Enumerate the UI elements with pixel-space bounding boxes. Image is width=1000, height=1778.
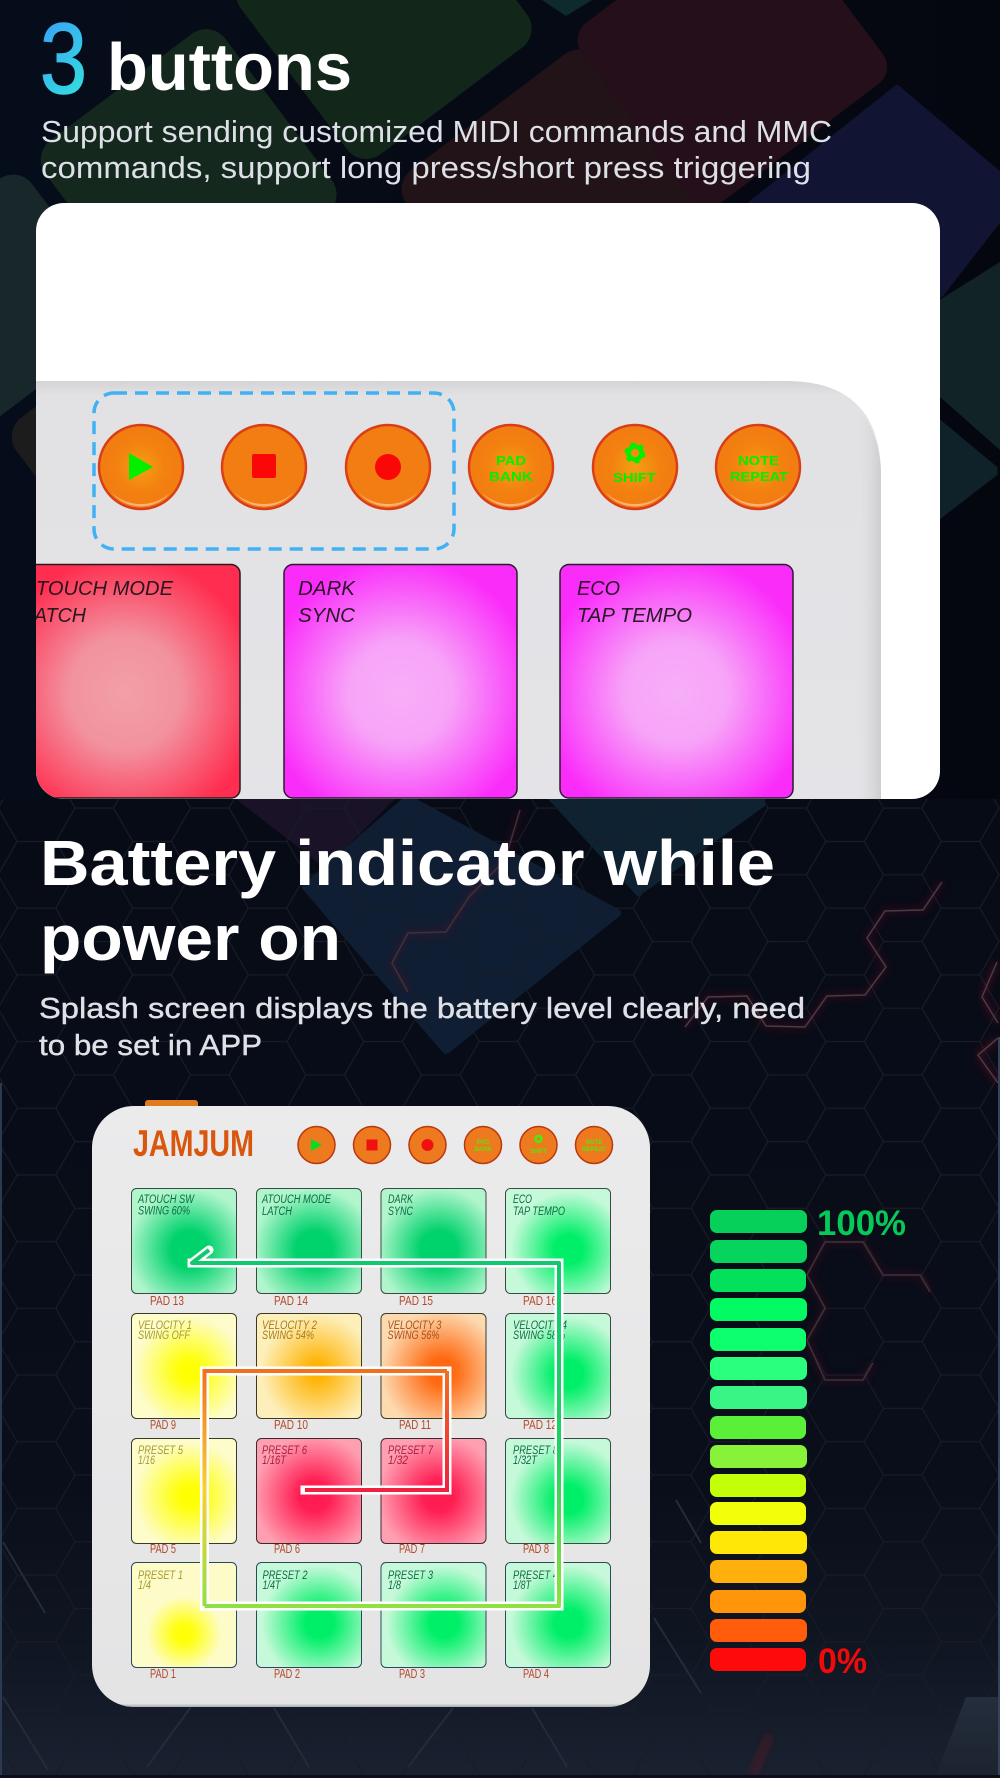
chart: battery level bars <box>710 1210 807 1671</box>
pad: dark, sync: SYNC <box>298 605 356 627</box>
heading: battery indicator: power on <box>40 902 341 974</box>
pad 1: PAD 1 <box>150 1667 176 1681</box>
arrow: spiral path across the pads <box>192 1250 559 1606</box>
text block: buttons description: Support sending customized MIDI commands and MMC <box>41 114 832 149</box>
pad 5: PAD 5 <box>150 1542 176 1556</box>
button: pad bank <box>469 425 553 509</box>
button: note repeat <box>716 425 800 509</box>
button: pad bank: PAD <box>496 453 526 468</box>
pad 12 <box>506 1314 610 1432</box>
button: play <box>99 425 183 509</box>
pad 12: VELOCITY 4 <box>513 1320 567 1332</box>
panel: close-up of the device buttons <box>10 203 940 810</box>
heading: battery indicator: Battery indicator while <box>40 827 775 899</box>
pad 4: PRESET 4 <box>513 1570 558 1582</box>
background: lower section with hexagon grid <box>0 799 1000 1778</box>
small button: pad bank: PAD <box>477 1140 490 1146</box>
pad 6: PAD 6 <box>274 1542 300 1556</box>
pad 10 <box>256 1314 362 1432</box>
pad 13 <box>132 1188 236 1308</box>
button: stop <box>222 425 306 509</box>
pad 14: ATOUCH MODE <box>261 1194 331 1206</box>
pad 8: PRESET 8 <box>513 1445 558 1457</box>
small button: record <box>409 1126 446 1164</box>
pad 5: 1/16 <box>138 1455 155 1467</box>
pad 7: PAD 7 <box>399 1542 425 1556</box>
pad 11: VELOCITY 3 <box>388 1320 442 1332</box>
pad 14: PAD 14 <box>274 1294 308 1308</box>
button: note repeat: NOTE <box>738 453 779 468</box>
pad 6: 1/16T <box>262 1455 287 1467</box>
pad 9: SWING OFF <box>138 1330 191 1342</box>
pad 1: 1/4 <box>138 1580 151 1592</box>
button: shift <box>593 425 677 509</box>
button: note repeat: REPEAT <box>730 469 788 484</box>
device: full controller with 16 pads <box>92 1100 650 1707</box>
heading: 3 buttons: buttons <box>107 30 352 105</box>
pad: eco, tap tempo <box>560 564 793 798</box>
pad 11 <box>381 1314 486 1432</box>
small button: stop <box>354 1126 390 1164</box>
text block: buttons description: commands, support long press/short press triggering <box>41 150 811 185</box>
pad 11: SWING 56% <box>388 1330 440 1342</box>
pad: dark, sync: DARK <box>298 578 357 600</box>
text block: battery description: Splash screen displays the battery level clearly, need <box>39 993 805 1025</box>
pad 9: PAD 9 <box>150 1418 176 1432</box>
pad: atouch mode, latch <box>36 564 241 799</box>
pad 9 <box>132 1314 236 1432</box>
button: shift: SHIFT <box>613 470 656 485</box>
pad 8 <box>506 1438 610 1556</box>
pad 3: PRESET 3 <box>388 1570 433 1582</box>
pad 15: DARK <box>388 1194 414 1206</box>
pad 15: PAD 15 <box>399 1294 433 1308</box>
button: record <box>346 425 430 509</box>
small button: pad bank <box>464 1126 502 1164</box>
pad 15 <box>381 1188 486 1308</box>
pad 8: 1/32T <box>513 1455 538 1467</box>
pad 4: 1/8T <box>513 1580 532 1592</box>
heading: 3 buttons: 3 <box>40 3 87 115</box>
pad 10: SWING 54% <box>262 1330 314 1342</box>
text block: battery description <box>39 993 805 1062</box>
pad 9: VELOCITY 1 <box>138 1320 192 1332</box>
pad 2: PAD 2 <box>274 1667 300 1681</box>
device side shading <box>870 431 881 799</box>
pad 10: VELOCITY 2 <box>262 1320 317 1332</box>
pad 16: PAD 16 <box>523 1294 557 1308</box>
pad 12: PAD 12 <box>523 1418 557 1432</box>
pad: dark, sync <box>284 564 517 798</box>
small button: note repeat <box>576 1126 612 1164</box>
button: pad bank: BANK <box>489 469 534 484</box>
pad 11: PAD 11 <box>399 1418 431 1432</box>
small button: shift: SHIFT <box>530 1149 547 1155</box>
pad 6 <box>256 1438 362 1556</box>
pad 13: ATOUCH SW <box>137 1194 195 1206</box>
small button: pad bank: BANK <box>474 1147 492 1153</box>
device body close-up <box>20 381 881 810</box>
pad 4 <box>506 1562 610 1681</box>
pad 5: PRESET 5 <box>138 1445 183 1457</box>
pad 8: PAD 8 <box>523 1542 549 1556</box>
pad 2: PRESET 2 <box>262 1570 308 1582</box>
pad: atouch mode, latch: LATCH <box>23 605 87 627</box>
pad 14: LATCH <box>262 1206 293 1218</box>
pad 3 <box>381 1562 486 1681</box>
pad 6: PRESET 6 <box>262 1445 307 1457</box>
logo: JAMJUM <box>133 1123 254 1164</box>
small button: play <box>298 1126 335 1164</box>
pad 2 <box>256 1562 362 1681</box>
pad 10: PAD 10 <box>274 1418 308 1432</box>
pad 16: ECO <box>513 1194 532 1206</box>
pad 16: TAP TEMPO <box>513 1206 565 1218</box>
pad 1 <box>132 1562 236 1681</box>
pad 13: SWING 60% <box>138 1206 190 1218</box>
small button: note repeat: NOTE <box>586 1140 602 1146</box>
pad 3: PAD 3 <box>399 1667 425 1681</box>
label: 100%: 100% <box>817 1204 906 1243</box>
small button: shift <box>520 1126 557 1164</box>
pad 15: SYNC <box>388 1206 414 1218</box>
background: top section with rounded pad shapes <box>0 0 1000 519</box>
pad 12: SWING 58% <box>513 1330 565 1342</box>
highlight: dashed selection around the three buttons <box>94 393 454 549</box>
pad: eco, tap tempo: ECO <box>577 578 620 600</box>
pad 3: 1/8 <box>388 1580 401 1592</box>
pad 14 <box>256 1188 362 1308</box>
heading: battery indicator <box>40 827 775 974</box>
pad 1: PRESET 1 <box>138 1570 183 1582</box>
pad 4: PAD 4 <box>523 1667 549 1681</box>
pad 7 <box>381 1438 486 1556</box>
pad: eco, tap tempo: TAP TEMPO <box>577 605 692 627</box>
pad 7: PRESET 7 <box>388 1445 433 1457</box>
heading: 3 buttons <box>40 3 352 115</box>
pad: atouch mode, latch: ATOUCH MODE <box>23 578 174 600</box>
pad 7: 1/32 <box>388 1455 409 1467</box>
text block: battery description: to be set in APP <box>39 1030 262 1062</box>
label: 0%: 0% <box>818 1642 867 1681</box>
small button: note repeat: REPEAT <box>582 1147 606 1153</box>
pad 5 <box>132 1438 236 1556</box>
text block: buttons description <box>41 114 832 185</box>
pad 16 <box>506 1188 610 1308</box>
pad 13: PAD 13 <box>150 1294 184 1308</box>
pad 2: 1/4T <box>262 1580 281 1592</box>
